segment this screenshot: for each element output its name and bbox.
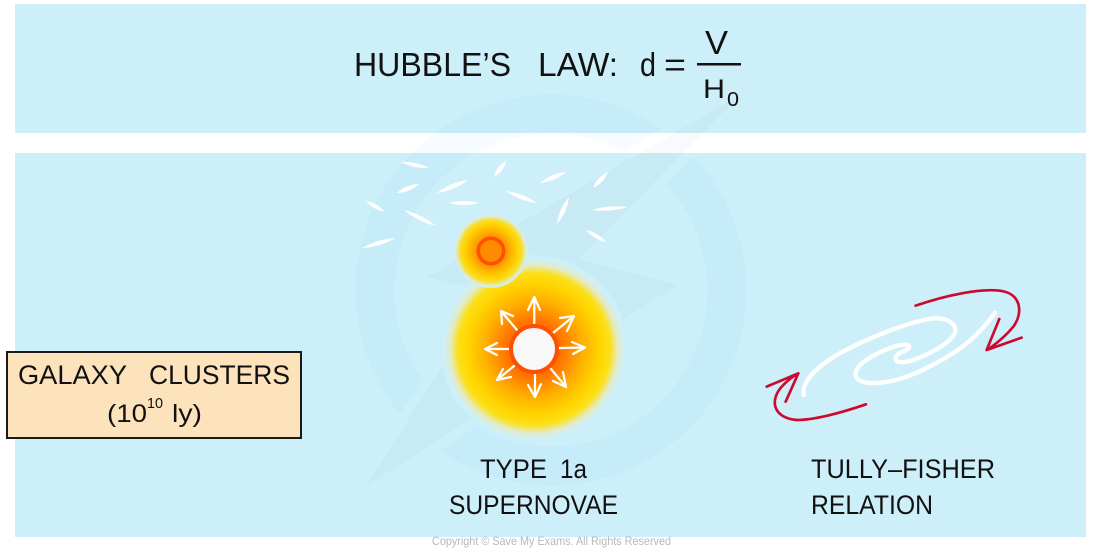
title: Hubble's law — [354, 24, 741, 111]
title: Hubble's law: d — [640, 46, 656, 83]
callout: galaxy clusters: GALAXY — [18, 360, 127, 390]
label: Type 1a supernovae: SUPERNOVAE — [449, 490, 618, 520]
icon: exploding white dwarf — [440, 255, 628, 443]
callout: galaxy clusters: CLUSTERS — [149, 360, 290, 390]
label: Type 1a supernovae — [449, 454, 618, 520]
title: Hubble's law: HUBBLE’S — [354, 46, 511, 83]
title: Hubble's law: LAW: — [538, 46, 618, 83]
title: Hubble's law: 0 — [727, 89, 739, 111]
copyright notice: Copyright © Save My Exams. All Rights Reserved — [432, 534, 671, 548]
title: Hubble's law: V — [705, 24, 728, 61]
watermark: lightning bolt — [365, 95, 740, 487]
icon: rotating spiral galaxy — [767, 290, 1022, 420]
title: Hubble's law: = — [664, 46, 686, 83]
panel: Hubble's law banner — [15, 4, 1086, 133]
label: Type 1a supernovae: TYPE — [480, 454, 547, 484]
label: Tully-Fisher relation — [811, 454, 995, 520]
callout: galaxy clusters: 10 — [147, 395, 163, 412]
title: Hubble's law: H — [703, 74, 725, 104]
icon: companion star debris — [362, 161, 628, 248]
panel: distance ladder methods — [15, 153, 1086, 537]
callout: galaxy clusters: (10 — [107, 400, 147, 428]
watermark: ring — [412, 133, 654, 153]
callout: galaxy clusters — [7, 352, 301, 438]
callout: galaxy clusters: ly) — [172, 400, 202, 428]
label: Tully-Fisher relation: RELATION — [811, 490, 933, 520]
label: Type 1a supernovae: 1a — [560, 454, 588, 484]
icon: companion star — [454, 214, 528, 288]
label: Tully-Fisher relation: TULLY–FISHER — [811, 454, 995, 484]
